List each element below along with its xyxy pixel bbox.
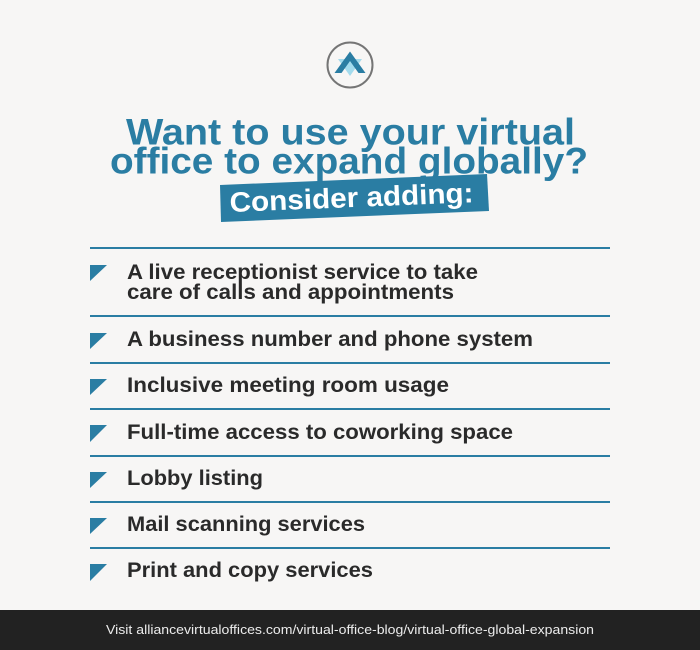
list item: live receptionist: A live receptionist service to take — [127, 260, 478, 284]
list item: live receptionist — [90, 260, 478, 304]
divider lines — [90, 247, 610, 549]
footer: Visit alliancevirtualoffices.com/virtual-office-blog/virtual-office-global-expansion — [106, 622, 594, 637]
title — [110, 112, 588, 182]
list item: business number: A business number and phone system — [127, 327, 533, 351]
list item: lobby listing: Lobby listing — [127, 466, 263, 490]
subtitle banner: Consider adding: — [229, 177, 474, 218]
title: office to expand globally? — [110, 140, 588, 182]
title: Want to use your virtual — [126, 112, 575, 152]
icon: logo — [328, 42, 372, 88]
footer — [0, 610, 700, 650]
list item: live receptionist: care of calls and appointments — [127, 280, 454, 304]
list item: meeting room: Inclusive meeting room usage — [127, 373, 449, 397]
list item: print and copy: Print and copy services — [127, 558, 373, 582]
list item: coworking: Full-time access to coworking space — [127, 420, 513, 444]
list item: mail scanning: Mail scanning services — [127, 512, 365, 536]
